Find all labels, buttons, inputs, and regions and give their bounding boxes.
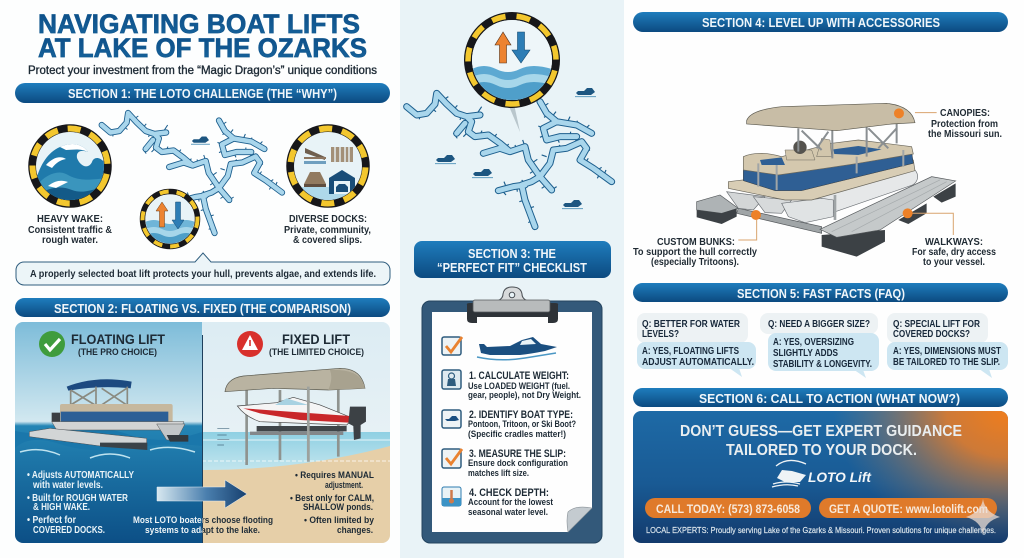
title: AT LAKE OF THE OZARKS [38, 33, 367, 63]
step 2: (Specific cradles matter!) [468, 429, 566, 439]
heavy wake label: rough water. [42, 235, 98, 246]
callout [16, 253, 390, 285]
icon: thermometer [442, 487, 461, 506]
faq 3: COVERED DOCKS? [893, 329, 970, 340]
comparison caption: systems to adapt to the lake. [145, 525, 260, 536]
section 1 banner: SECTION 1: THE LOTO CHALLENGE (THE “WHY”) [68, 87, 337, 101]
panel: fixed lift [202, 322, 390, 543]
icon: large water level arrows [464, 12, 560, 132]
floating bullets: with water levels. [32, 480, 103, 491]
fixed lift heading: FIXED LIFT [282, 331, 350, 347]
fixed bullets: changes. [337, 525, 373, 536]
faq 3: Q: SPECIAL LIFT FOR [893, 319, 981, 330]
step 1: Use LOADED WEIGHT (fuel. [468, 381, 570, 391]
call button: CALL TODAY: (573) 873-6058 [656, 502, 800, 516]
panel: middle column background [400, 0, 624, 558]
custom bunks label: CUSTOM BUNKS: [657, 237, 735, 248]
faq 1 [637, 313, 756, 377]
icon: diverse docks [285, 123, 371, 209]
canopies label: the Missouri sun. [928, 129, 1002, 140]
icons: boats on lake [435, 88, 596, 209]
step 3: 3. MEASURE THE SLIP: [469, 448, 566, 460]
icon: water level arrows small [142, 192, 198, 246]
deck [728, 160, 915, 200]
faq 2: STABILITY & LONGEVITY. [773, 359, 872, 370]
section 5 banner [633, 283, 1008, 302]
section 3 banner: “PERFECT FIT” CHECKLIST [437, 261, 587, 275]
comparison caption: Most LOTO boaters choose flooting [133, 515, 273, 526]
step 4: seasonal water level. [468, 507, 548, 517]
icon: checkbox top [442, 337, 462, 355]
floating bullets: COVERED DOCKS. [33, 525, 105, 536]
diverse docks label: & covered slips. [293, 235, 362, 246]
faq 3: A: YES, DIMENSIONS MUST [893, 346, 1001, 357]
step 4 [468, 487, 553, 517]
faq 2: SLIGHTLY ADDS [773, 348, 838, 359]
step 1: gear, people), not Dry Weight. [468, 390, 581, 400]
quote button: GET A QUOTE: www.lotolift.com [829, 502, 988, 516]
title [38, 9, 367, 63]
step 4: 4. CHECK DEPTH: [469, 487, 549, 499]
section 3 banner: SECTION 3: THE [468, 247, 556, 261]
diverse docks label: Private, community, [284, 225, 371, 236]
faq 2: A: YES, OVERSIZING [773, 337, 854, 348]
canopy frame [798, 124, 897, 158]
faq 1: Q: BETTER FOR WATER [642, 319, 741, 330]
walkways label: For safe, dry access [912, 247, 996, 258]
section 2 banner [15, 298, 390, 317]
floating pontoon illustration [29, 379, 188, 450]
faq 2 [760, 313, 879, 378]
step 4: Account for the lowest [468, 497, 553, 507]
logo [772, 460, 872, 487]
canopies label: Protection from [931, 119, 998, 130]
fixed lift heading: (THE LIMITED CHOICE) [269, 347, 364, 357]
section 5 banner: SECTION 5: FAST FACTS (FAQ) [737, 287, 905, 301]
icon: check [442, 449, 462, 468]
fixed bullets: • Often limited by [304, 515, 375, 526]
floating lift heading [71, 331, 165, 357]
step 3 [468, 448, 568, 478]
walkways label: to your vessel. [923, 257, 985, 268]
walkways label: WALKWAYS: [925, 237, 983, 248]
icon: boat [477, 337, 557, 360]
pontoon tubes [727, 177, 908, 223]
diverse docks label: DIVERSE DOCKS: [289, 214, 367, 225]
section 2 banner: SECTION 2: FLOATING VS. FIXED (THE COMPARISON) [54, 302, 351, 316]
faq 3: BE TAILORED TO THE SLIP. [893, 357, 1000, 368]
step 1: 1. CALCULATE WEIGHT: [469, 370, 569, 382]
subtitle: Protect your investment from the “Magic Dragon’s” unique conditions [28, 65, 377, 77]
arrow: floating to fixed [157, 480, 247, 508]
faq 1: A: YES, FLOATING LIFTS [642, 346, 739, 357]
panel: floating lift [15, 322, 202, 543]
canopy [747, 103, 915, 131]
quote button [819, 498, 997, 518]
icon: green check [39, 331, 65, 357]
faq 3 [887, 313, 1008, 378]
heavy wake label [28, 214, 112, 246]
clip [467, 287, 558, 323]
icon: boat type [442, 410, 461, 428]
panel: clipboard [422, 287, 602, 543]
fixed lift heading [269, 331, 364, 357]
faq 2: Q: NEED A BIGGER SIZE? [768, 319, 870, 330]
step 2: 2. IDENTIFY BOAT TYPE: [469, 409, 573, 421]
step 2 [468, 409, 576, 439]
fixed bullets: adjustment. [325, 480, 363, 491]
comparison caption [133, 515, 273, 536]
floating bullets [27, 470, 134, 536]
step 3: matches lift size. [468, 468, 529, 478]
title: NAVIGATING BOAT LIFTS [38, 9, 360, 39]
canopies label [928, 108, 1002, 140]
section 3 banner [414, 241, 611, 278]
frame [737, 208, 822, 233]
fixed bullets: • Best only for CALM, [290, 493, 374, 504]
panel: call to action [633, 411, 1008, 543]
floating bullets: • Built for ROUGH WATER [27, 493, 129, 504]
icon: sparkle [966, 499, 1000, 535]
step 3: Ensure dock configuration [468, 458, 568, 468]
section 4 banner: SECTION 4: LEVEL UP WITH ACCESSORIES [702, 16, 940, 30]
step 1 [468, 370, 581, 400]
section 6 banner [633, 388, 1008, 407]
call button [645, 498, 811, 518]
pontoon illustration with accessories [697, 103, 956, 257]
icon: small boat [191, 136, 210, 144]
panel: left column background [0, 0, 400, 558]
blue fence [743, 152, 913, 191]
cta headline: TAILORED TO YOUR DOCK. [726, 442, 917, 459]
icon: heavy wake [28, 124, 112, 208]
fixed lift illustration [217, 368, 366, 465]
custom bunks label [633, 237, 757, 268]
faq 1: ADJUST AUTOMATICALLY. [642, 357, 754, 368]
canopies label: CANOPIES: [940, 108, 990, 119]
icon: red warning [237, 331, 263, 357]
page curl [567, 507, 592, 532]
left dock float [697, 195, 738, 224]
footer line: LOCAL EXPERTS: Proudly serving Lake of the Gzarks & Missouri. Proven solutions for unique challenges. [646, 526, 996, 535]
seats and rails [743, 138, 913, 190]
lake map: middle [407, 93, 612, 227]
floating lift heading: FLOATING LIFT [71, 331, 165, 347]
cta headline: DON’T GUESS—GET EXPERT GUIDANCE [680, 423, 962, 440]
walkway [820, 177, 956, 257]
orange markers [738, 108, 953, 240]
fixed bullets: • Requires MANUAL [295, 470, 374, 481]
section 6 banner: SECTION 6: CALL TO ACTION (WHAT NOW?) [699, 392, 960, 406]
panel: right column background [624, 0, 1024, 558]
floating bullets: & HIGH WAKE. [33, 502, 90, 513]
fixed bullets: SHALLOW ponds. [303, 502, 373, 513]
custom bunks label: (especially Tritoons). [651, 257, 739, 268]
walkways label [912, 237, 996, 268]
lake map: section 1 [102, 113, 282, 233]
section 1 banner [15, 83, 390, 103]
callout: A properly selected boat lift protects your hull, prevents algae, and extends life. [30, 269, 376, 280]
floating lift heading: (THE PRO CHOICE) [78, 347, 157, 357]
custom bunks label: To support the hull correctly [633, 247, 757, 258]
icon: scale [442, 370, 461, 389]
floating bullets: • Adjusts AUTOMATICALLY [27, 470, 134, 481]
logo: LOTO Lift [808, 469, 872, 485]
step 2: Pontoon, Tritoon, or Ski Boot? [468, 419, 576, 429]
fixed bullets [290, 470, 375, 536]
diverse docks label [284, 214, 371, 246]
floating bullets: • Perfect for [27, 515, 76, 526]
divider line [202, 335, 204, 543]
section 4 banner [633, 12, 1008, 32]
heavy wake label: HEAVY WAKE: [37, 214, 103, 225]
heavy wake label: Consistent traffic & [28, 225, 112, 236]
cta headline [680, 423, 962, 459]
faq 1: LEVELS? [642, 329, 679, 340]
